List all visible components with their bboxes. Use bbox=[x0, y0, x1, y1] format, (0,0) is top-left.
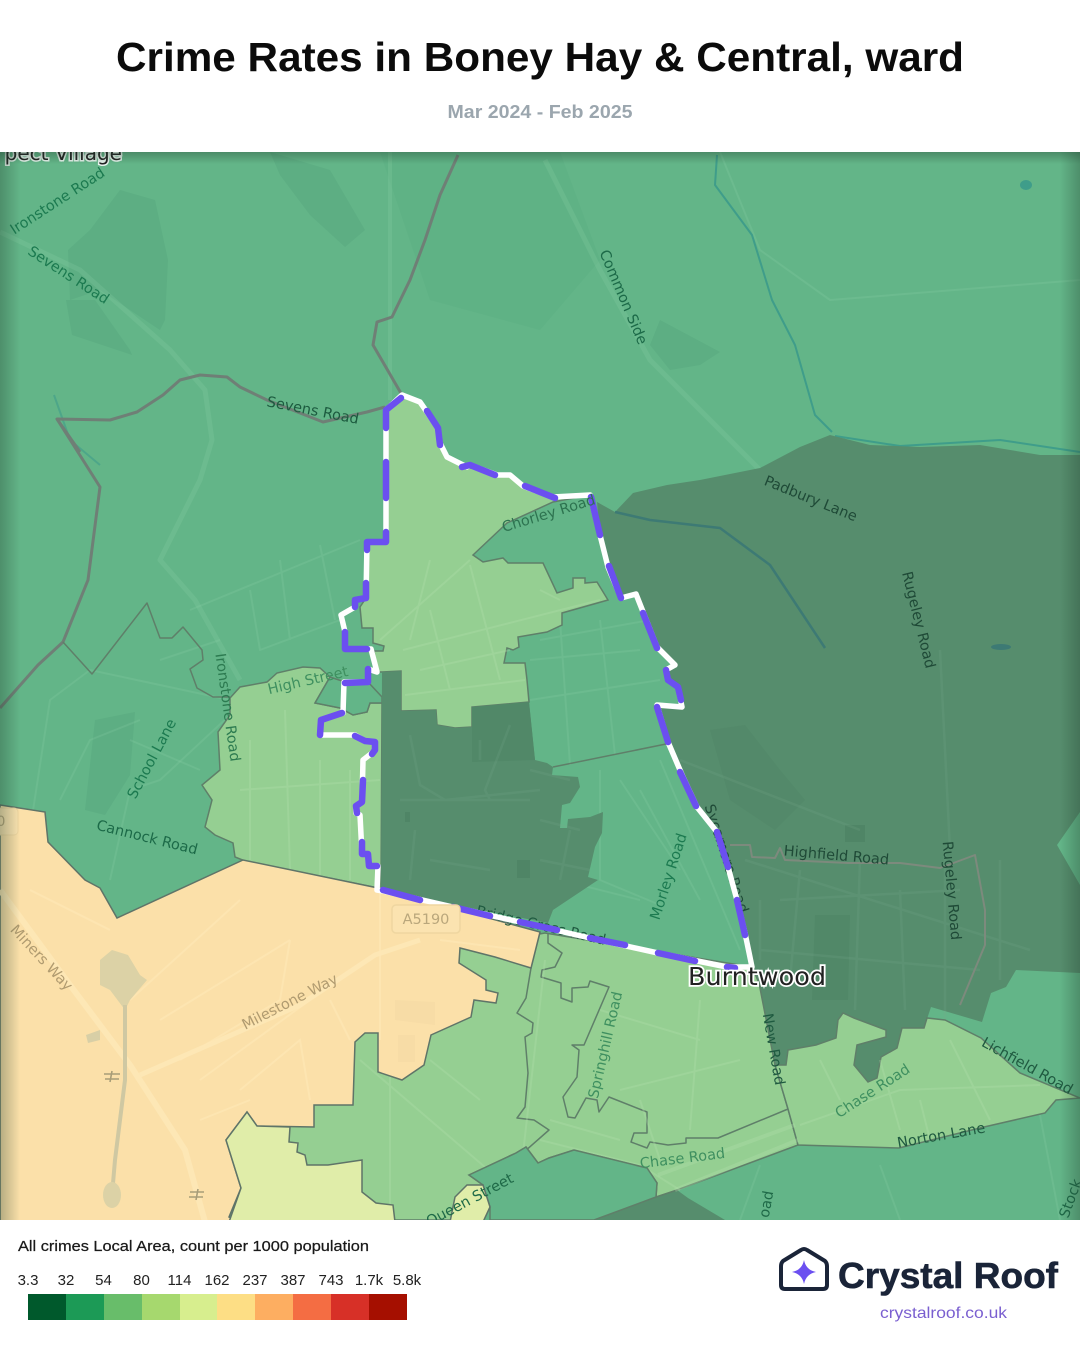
label: Chorley Road: Chorley Road bbox=[500, 492, 597, 536]
label: Norton Lane: Norton Lane bbox=[896, 1120, 987, 1152]
label: New Road: New Road bbox=[759, 1012, 787, 1086]
label: Common Side: Common Side bbox=[596, 248, 650, 347]
divider: ward east bbox=[553, 744, 666, 767]
map edge shading bbox=[0, 152, 1080, 1220]
label: Cannock Road: Cannock Road bbox=[95, 818, 199, 858]
area: small mid green pocket bbox=[315, 677, 382, 715]
ward boundary: purple dashes bbox=[320, 398, 745, 968]
area: dark wedge at bottom bbox=[594, 1190, 725, 1220]
legend tick labels: 32 bbox=[58, 1272, 74, 1289]
area: light green west of ward bbox=[202, 667, 382, 890]
label: Prospect Village: pect Village bbox=[5, 141, 122, 165]
woodland patches bbox=[66, 152, 720, 815]
central detail: darker block and roads bbox=[529, 703, 535, 760]
label: Rugeley Road south: Rugeley Road bbox=[939, 841, 963, 941]
label: A5190 road shield: A5190 bbox=[403, 912, 449, 928]
label: Springhill Road: Springhill Road bbox=[586, 990, 626, 1100]
inner boundaries south bbox=[517, 932, 788, 1163]
legend tick labels bbox=[18, 1272, 422, 1289]
icon: house with star bbox=[781, 1249, 827, 1289]
label: High Street: High Street bbox=[266, 664, 350, 698]
website url: crystalroof.co.uk bbox=[880, 1305, 1008, 1322]
legend tick labels: 80 bbox=[133, 1272, 150, 1289]
label: partial shield at left edge bbox=[0, 808, 18, 835]
area: light green ward north bbox=[360, 395, 608, 728]
mid green pocket south bbox=[469, 1147, 657, 1220]
legend tick labels: 237 bbox=[242, 1272, 268, 1289]
legend tick labels: 162 bbox=[204, 1272, 230, 1289]
area: dark green central ward bbox=[381, 671, 603, 923]
area: pale yellow south bbox=[226, 1112, 395, 1222]
label: A5190 road shield bbox=[392, 905, 460, 933]
label: Chase Road south: Chase Road bbox=[639, 1146, 726, 1172]
dark area detail: roads and patches bbox=[615, 512, 1030, 1020]
logo: Crystal Roof bbox=[781, 1249, 1059, 1322]
area: light green east of New Road bbox=[775, 1013, 1080, 1148]
label: Rugeley Road north: Rugeley Road bbox=[898, 570, 938, 670]
legend title: All crimes Local Area, count per 1000 population bbox=[18, 1238, 369, 1255]
label: road along east boundary: Sycamore Road bbox=[701, 802, 751, 915]
label: Bridge Cross Road: Bridge Cross Road bbox=[474, 903, 607, 949]
area: pale yellow Queen Street wedge bbox=[450, 1185, 490, 1222]
yellow area: road network, lake and stations bbox=[0, 889, 420, 1220]
streams bbox=[54, 155, 1080, 465]
labels under the ward boundary bbox=[474, 802, 751, 949]
pond bbox=[1020, 180, 1032, 190]
label: Morley Road: Morley Road bbox=[648, 832, 691, 922]
light road network on base bbox=[0, 152, 1080, 1220]
label: Ironstone Road west: Ironstone Road bbox=[211, 652, 242, 763]
label: Highfield Road: Highfield Road bbox=[783, 843, 890, 869]
thin boundaries west bbox=[63, 603, 230, 697]
label: Miners Way: Miners Way bbox=[7, 922, 76, 995]
light road network in light green areas bbox=[240, 560, 1040, 1220]
label: Lichfield Road: Lichfield Road bbox=[979, 1035, 1075, 1098]
label: Burntwood: Burntwood bbox=[688, 962, 826, 991]
legend tick labels: 1.7k bbox=[355, 1272, 384, 1289]
legend tick labels: 114 bbox=[168, 1272, 191, 1289]
label: road fragment: oad bbox=[757, 1190, 777, 1219]
legend tick labels: 5.8k bbox=[393, 1272, 422, 1289]
label: Padbury Lane: Padbury Lane bbox=[762, 473, 859, 525]
label: Sevens Road: Sevens Road bbox=[265, 394, 360, 428]
area: light green south bbox=[270, 933, 798, 1220]
legend tick labels: 743 bbox=[318, 1272, 344, 1289]
ward boundary: white outline bbox=[320, 395, 752, 967]
wordmark: Crystal Roof bbox=[838, 1255, 1059, 1296]
legend colour scale bbox=[28, 1294, 407, 1320]
legend tick labels: 54 bbox=[95, 1272, 112, 1289]
label: Queen Street: Queen Street bbox=[424, 1171, 517, 1230]
boundaries and footpaths NW bbox=[0, 155, 458, 708]
label: School Lane: School Lane bbox=[125, 717, 180, 802]
label: Ironstone Road north: Ironstone Road bbox=[8, 165, 108, 238]
legend tick labels: 3.3 bbox=[18, 1272, 38, 1289]
area: yellow south west (higher crime) bbox=[0, 805, 540, 1222]
title: Crime Rates in Boney Hay & Central, ward bbox=[116, 34, 964, 80]
label: Milestone Way: Milestone Way bbox=[240, 971, 341, 1033]
area: dark green east (lowest-crime band) bbox=[597, 435, 1080, 1082]
subtitle: date range: Mar 2024 - Feb 2025 bbox=[448, 102, 632, 122]
legend bbox=[18, 1238, 422, 1320]
label: Chase Road east: Chase Road bbox=[833, 1062, 913, 1122]
label: Sevens Road north: Sevens Road bbox=[25, 244, 112, 308]
legend tick labels: 387 bbox=[280, 1272, 306, 1289]
map base: mid green areas bbox=[0, 152, 1080, 1220]
